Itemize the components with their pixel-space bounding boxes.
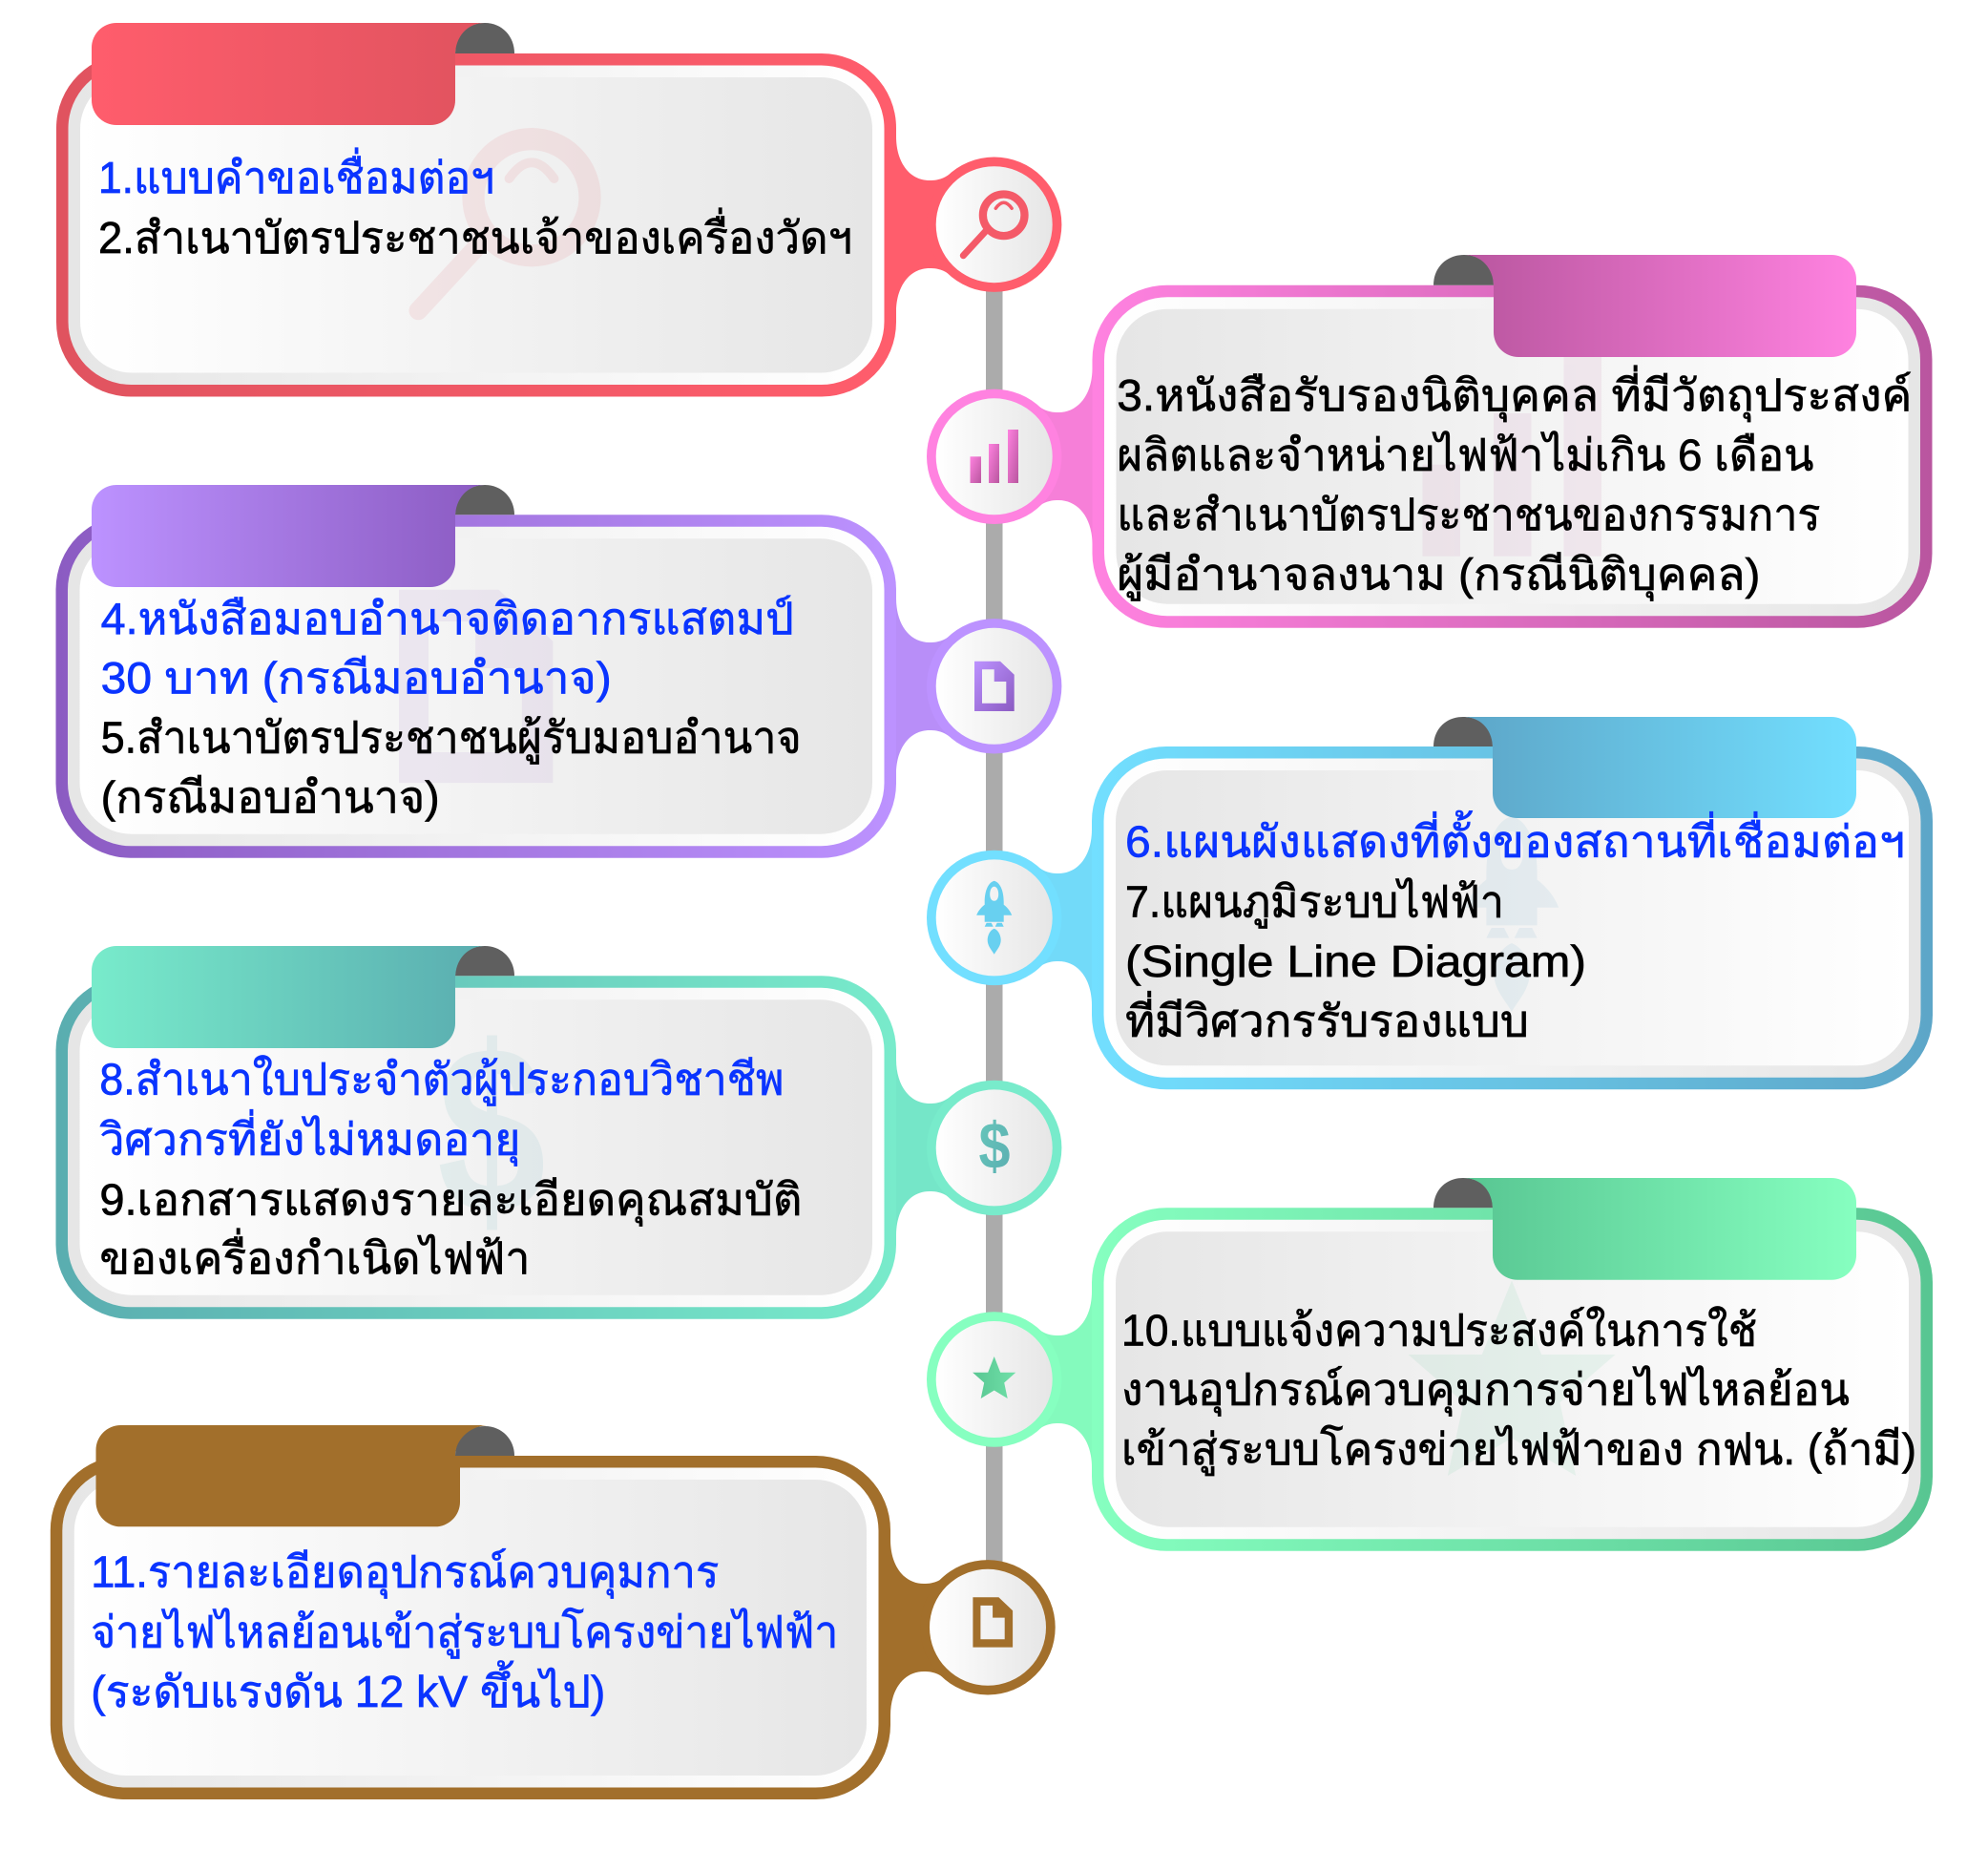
text block 11: (ระดับแรงดัน 12 kV ขึ้นไป) (91, 1660, 605, 1716)
text block 4: 5.สำเนาบัตรประชาชนผู้รับมอบอำนาจ (101, 713, 802, 765)
text block 11 (91, 1547, 838, 1716)
text block 8 (99, 1055, 802, 1283)
text block 4 (101, 594, 802, 822)
watermark: star (1409, 1280, 1615, 1476)
panel: card 10 (1036, 1178, 1933, 1551)
connector to node 4 (1036, 830, 1105, 1005)
icon: bars (970, 430, 1018, 483)
tab curl (1433, 255, 1494, 285)
node 2: bars (927, 389, 1061, 524)
tab ribbon (92, 946, 485, 1048)
text block 3: ผู้มีอำนาจลงนาม (กรณีนิติบุคคล) (1117, 550, 1760, 602)
connector to node 6 (1036, 1292, 1105, 1467)
watermark: rocket (1465, 816, 1559, 1012)
connector to node 3 (883, 599, 952, 774)
icon: magnifier (963, 195, 1025, 256)
node 6: star (927, 1312, 1061, 1447)
node 7: document (920, 1560, 1056, 1695)
card frame (1092, 1208, 1933, 1551)
card frame (55, 976, 896, 1319)
text block 4: 4.หนังสือมอบอำนาจติดอากรแสตมป์ (101, 594, 794, 643)
tab ribbon (95, 1425, 489, 1526)
connector to node 1 (883, 137, 952, 312)
node 5: dollar (927, 1081, 1061, 1215)
tab curl (455, 1426, 514, 1456)
text block 8: 8.สำเนาใบประจำตัวผู้ประกอบวิชาชีพ (99, 1055, 784, 1106)
text block 10: เข้าสู่ระบบโครงข่ายไฟฟ้าของ กฟน. (ถ้ามี) (1121, 1424, 1916, 1476)
text block 8: ของเครื่องกำเนิดไฟฟ้า (99, 1228, 530, 1283)
text block 3: ผลิตและจำหน่ายไฟฟ้าไม่เกิน 6 เดือน (1117, 431, 1813, 480)
tab curl (455, 946, 514, 976)
tab curl (1433, 1178, 1493, 1208)
tab ribbon (1463, 1178, 1856, 1280)
panel: card 11 (51, 1425, 946, 1799)
node 4: rocket (927, 851, 1061, 985)
text block 1 (98, 147, 852, 263)
text block 3: 3.หนังสือรับรองนิติบุคคล ที่มีวัตถุประสงค์ (1117, 365, 1912, 423)
connector to node 5 (883, 1060, 952, 1235)
card frame (1092, 746, 1933, 1089)
text block 1: 2.สำเนาบัตรประชาชนเจ้าของเครื่องวัดฯ (98, 207, 852, 263)
text block 11: จ่ายไฟไหลย้อนเข้าสู่ระบบโครงข่ายไฟฟ้า (91, 1608, 838, 1659)
card frame (1092, 285, 1932, 628)
card frame (55, 515, 896, 858)
tab ribbon (92, 485, 485, 587)
watermark: bars (1422, 356, 1601, 557)
tab curl (455, 23, 514, 53)
text block 3: และสำเนาบัตรประชาชนของกรรมการ (1117, 490, 1820, 539)
text block 1: 1.แบบคำขอเชื่อมต่อฯ (98, 147, 494, 202)
text block 3 (1117, 365, 1912, 602)
icon: star (973, 1356, 1015, 1398)
icon: dollar: $ (979, 1109, 1010, 1183)
watermark: dollar sign: $ (437, 997, 546, 1263)
node 1: magnifier (927, 157, 1061, 292)
connector to node 2 (1036, 368, 1105, 544)
text block 4: 30 บาท (กรณีมอบอำนาจ) (101, 653, 612, 703)
text block 6: ที่มีวิศวกรรับรองแบบ (1125, 991, 1529, 1046)
connector to node 7 (877, 1540, 946, 1715)
text block 10: งานอุปกรณ์ควบคุมการจ่ายไฟไหลย้อน (1121, 1365, 1850, 1418)
text block 10 (1121, 1305, 1916, 1476)
panel: card 8 (55, 946, 952, 1319)
text block 4: (กรณีมอบอำนาจ) (101, 772, 440, 822)
panel: card 3 (1036, 255, 1932, 628)
panel: card 6 (1036, 717, 1933, 1089)
text block 11: 11.รายละเอียดอุปกรณ์ควบคุมการ (91, 1547, 719, 1600)
watermark: document (399, 590, 553, 783)
text block 8: 9.เอกสารแสดงรายละเอียดคุณสมบัติ (99, 1174, 802, 1227)
text block 6 (1125, 810, 1905, 1046)
tab curl (1433, 717, 1493, 746)
tab curl (455, 485, 514, 515)
text block 6: (Single Line Diagram) (1125, 936, 1586, 986)
icon: document (974, 662, 1015, 711)
tab ribbon (1463, 717, 1856, 818)
text block 8: วิศวกรที่ยังไม่หมดอายุ (99, 1108, 520, 1167)
tab ribbon (1464, 255, 1856, 357)
text block 6: 6.แผนผังแสดงที่ตั้งของสถานที่เชื่อมต่อฯ (1125, 810, 1905, 867)
panel: card 4 (55, 485, 952, 858)
card frame (51, 1456, 890, 1799)
timeline spine (986, 224, 1002, 1628)
card frame (56, 53, 896, 397)
icon: document (973, 1597, 1013, 1648)
panel: card 1 (56, 23, 952, 397)
text block 10: 10.แบบแจ้งความประสงค์ในการใช้ (1121, 1305, 1757, 1355)
icon: rocket (976, 881, 1012, 955)
text block 6: 7.แผนภูมิระบบไฟฟ้า (1125, 877, 1504, 929)
tab ribbon (92, 23, 485, 125)
watermark: magnifier (418, 139, 590, 310)
node 3: document (927, 619, 1061, 754)
